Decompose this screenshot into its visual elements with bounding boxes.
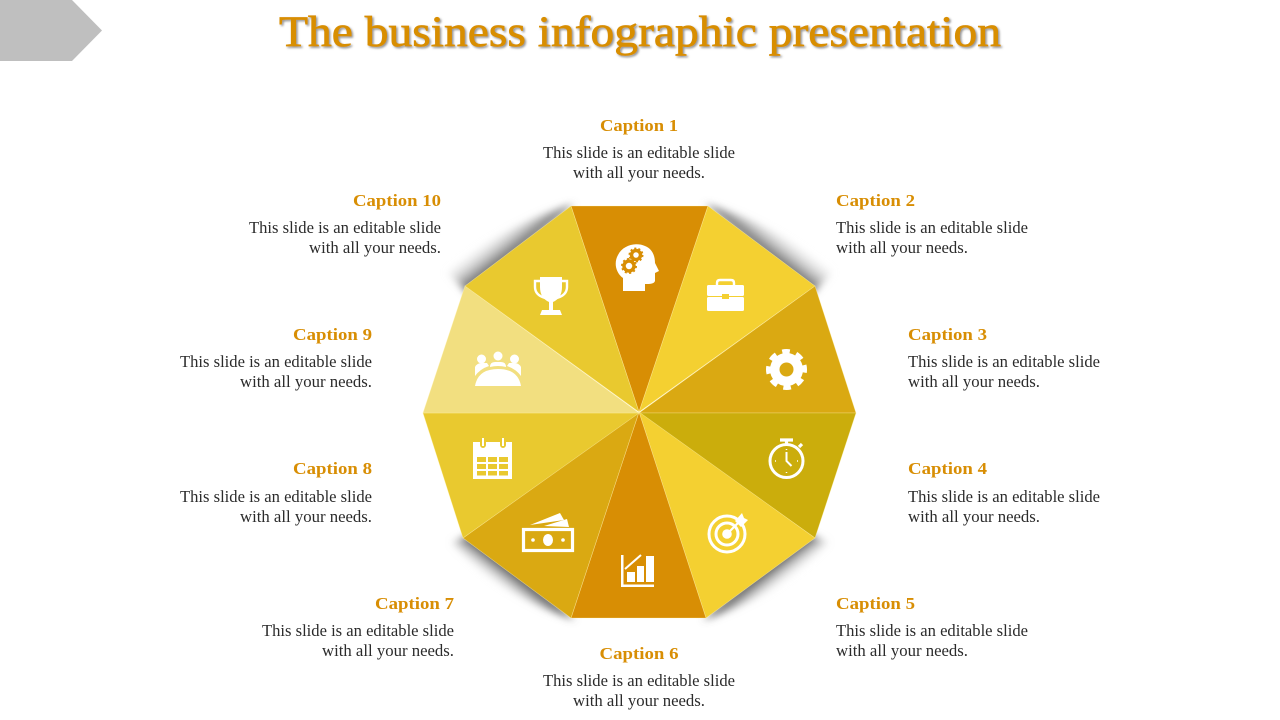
icon: briefcase: [707, 280, 744, 311]
icon: head with gears: [616, 244, 659, 291]
polygon shadows: [447, 204, 833, 620]
caption 10: [249, 191, 441, 257]
decagon wedge chart: [423, 206, 856, 618]
caption 3: [908, 325, 1100, 391]
caption 10: This slide is an editable slide: [249, 218, 441, 237]
caption 5: [836, 594, 1028, 660]
caption 1: Caption 1: [600, 116, 678, 135]
wedge 9: [423, 286, 639, 413]
caption 8: Caption 8: [293, 459, 372, 478]
caption 1: [543, 116, 735, 182]
caption 6: [543, 644, 735, 710]
wedge 3: [639, 286, 856, 413]
wedge 1: [571, 206, 708, 412]
caption 7: [262, 594, 454, 660]
caption 6: Caption 6: [600, 644, 678, 663]
caption 5: Caption 5: [836, 594, 915, 613]
icon: gear: [765, 348, 808, 391]
wedge 8: [423, 413, 639, 538]
caption 10: Caption 10: [353, 191, 441, 210]
caption 3: This slide is an editable slide: [908, 352, 1100, 371]
caption 9: with all your needs.: [240, 372, 372, 391]
caption 2: This slide is an editable slide: [836, 218, 1028, 237]
icon: calendar: [473, 438, 512, 479]
caption 4: This slide is an editable slide: [908, 487, 1100, 506]
caption 7: This slide is an editable slide: [262, 621, 454, 640]
corner arrow tag: [0, 0, 102, 61]
caption 2: Caption 2: [836, 191, 915, 210]
icon: target with arrow: [709, 513, 748, 552]
caption 5: with all your needs.: [836, 641, 968, 660]
caption 2: [836, 191, 1028, 257]
wedge 5: [639, 412, 815, 618]
title: The business infographic presentation: [279, 9, 1001, 56]
caption 5: This slide is an editable slide: [836, 621, 1028, 640]
caption 4: with all your needs.: [908, 507, 1040, 526]
wedge 2: [639, 206, 815, 412]
caption 7: Caption 7: [375, 594, 454, 613]
icon: bar chart: [621, 555, 654, 587]
caption 8: [180, 459, 372, 526]
wedge 10: [465, 206, 639, 412]
caption 4: Caption 4: [908, 459, 987, 478]
icon: stopwatch: [770, 440, 803, 478]
caption 10: with all your needs.: [309, 238, 441, 257]
caption 4: [908, 459, 1100, 526]
wedge 7: [463, 412, 639, 618]
icon: trophy: [535, 277, 567, 315]
wedge 4: [639, 413, 856, 538]
icon: team at table: [475, 352, 521, 386]
caption 3: with all your needs.: [908, 372, 1040, 391]
caption 9: [180, 325, 372, 391]
icon: banknotes: [524, 513, 572, 550]
caption 6: with all your needs.: [573, 691, 705, 710]
caption 7: with all your needs.: [322, 641, 454, 660]
caption 1: This slide is an editable slide: [543, 143, 735, 162]
caption 3: Caption 3: [908, 325, 987, 344]
caption 2: with all your needs.: [836, 238, 968, 257]
caption 9: This slide is an editable slide: [180, 352, 372, 371]
wedge 6: [571, 412, 706, 618]
caption 8: This slide is an editable slide: [180, 487, 372, 506]
caption 6: This slide is an editable slide: [543, 671, 735, 690]
caption 8: with all your needs.: [240, 507, 372, 526]
caption 1: with all your needs.: [573, 163, 705, 182]
caption 9: Caption 9: [293, 325, 372, 344]
